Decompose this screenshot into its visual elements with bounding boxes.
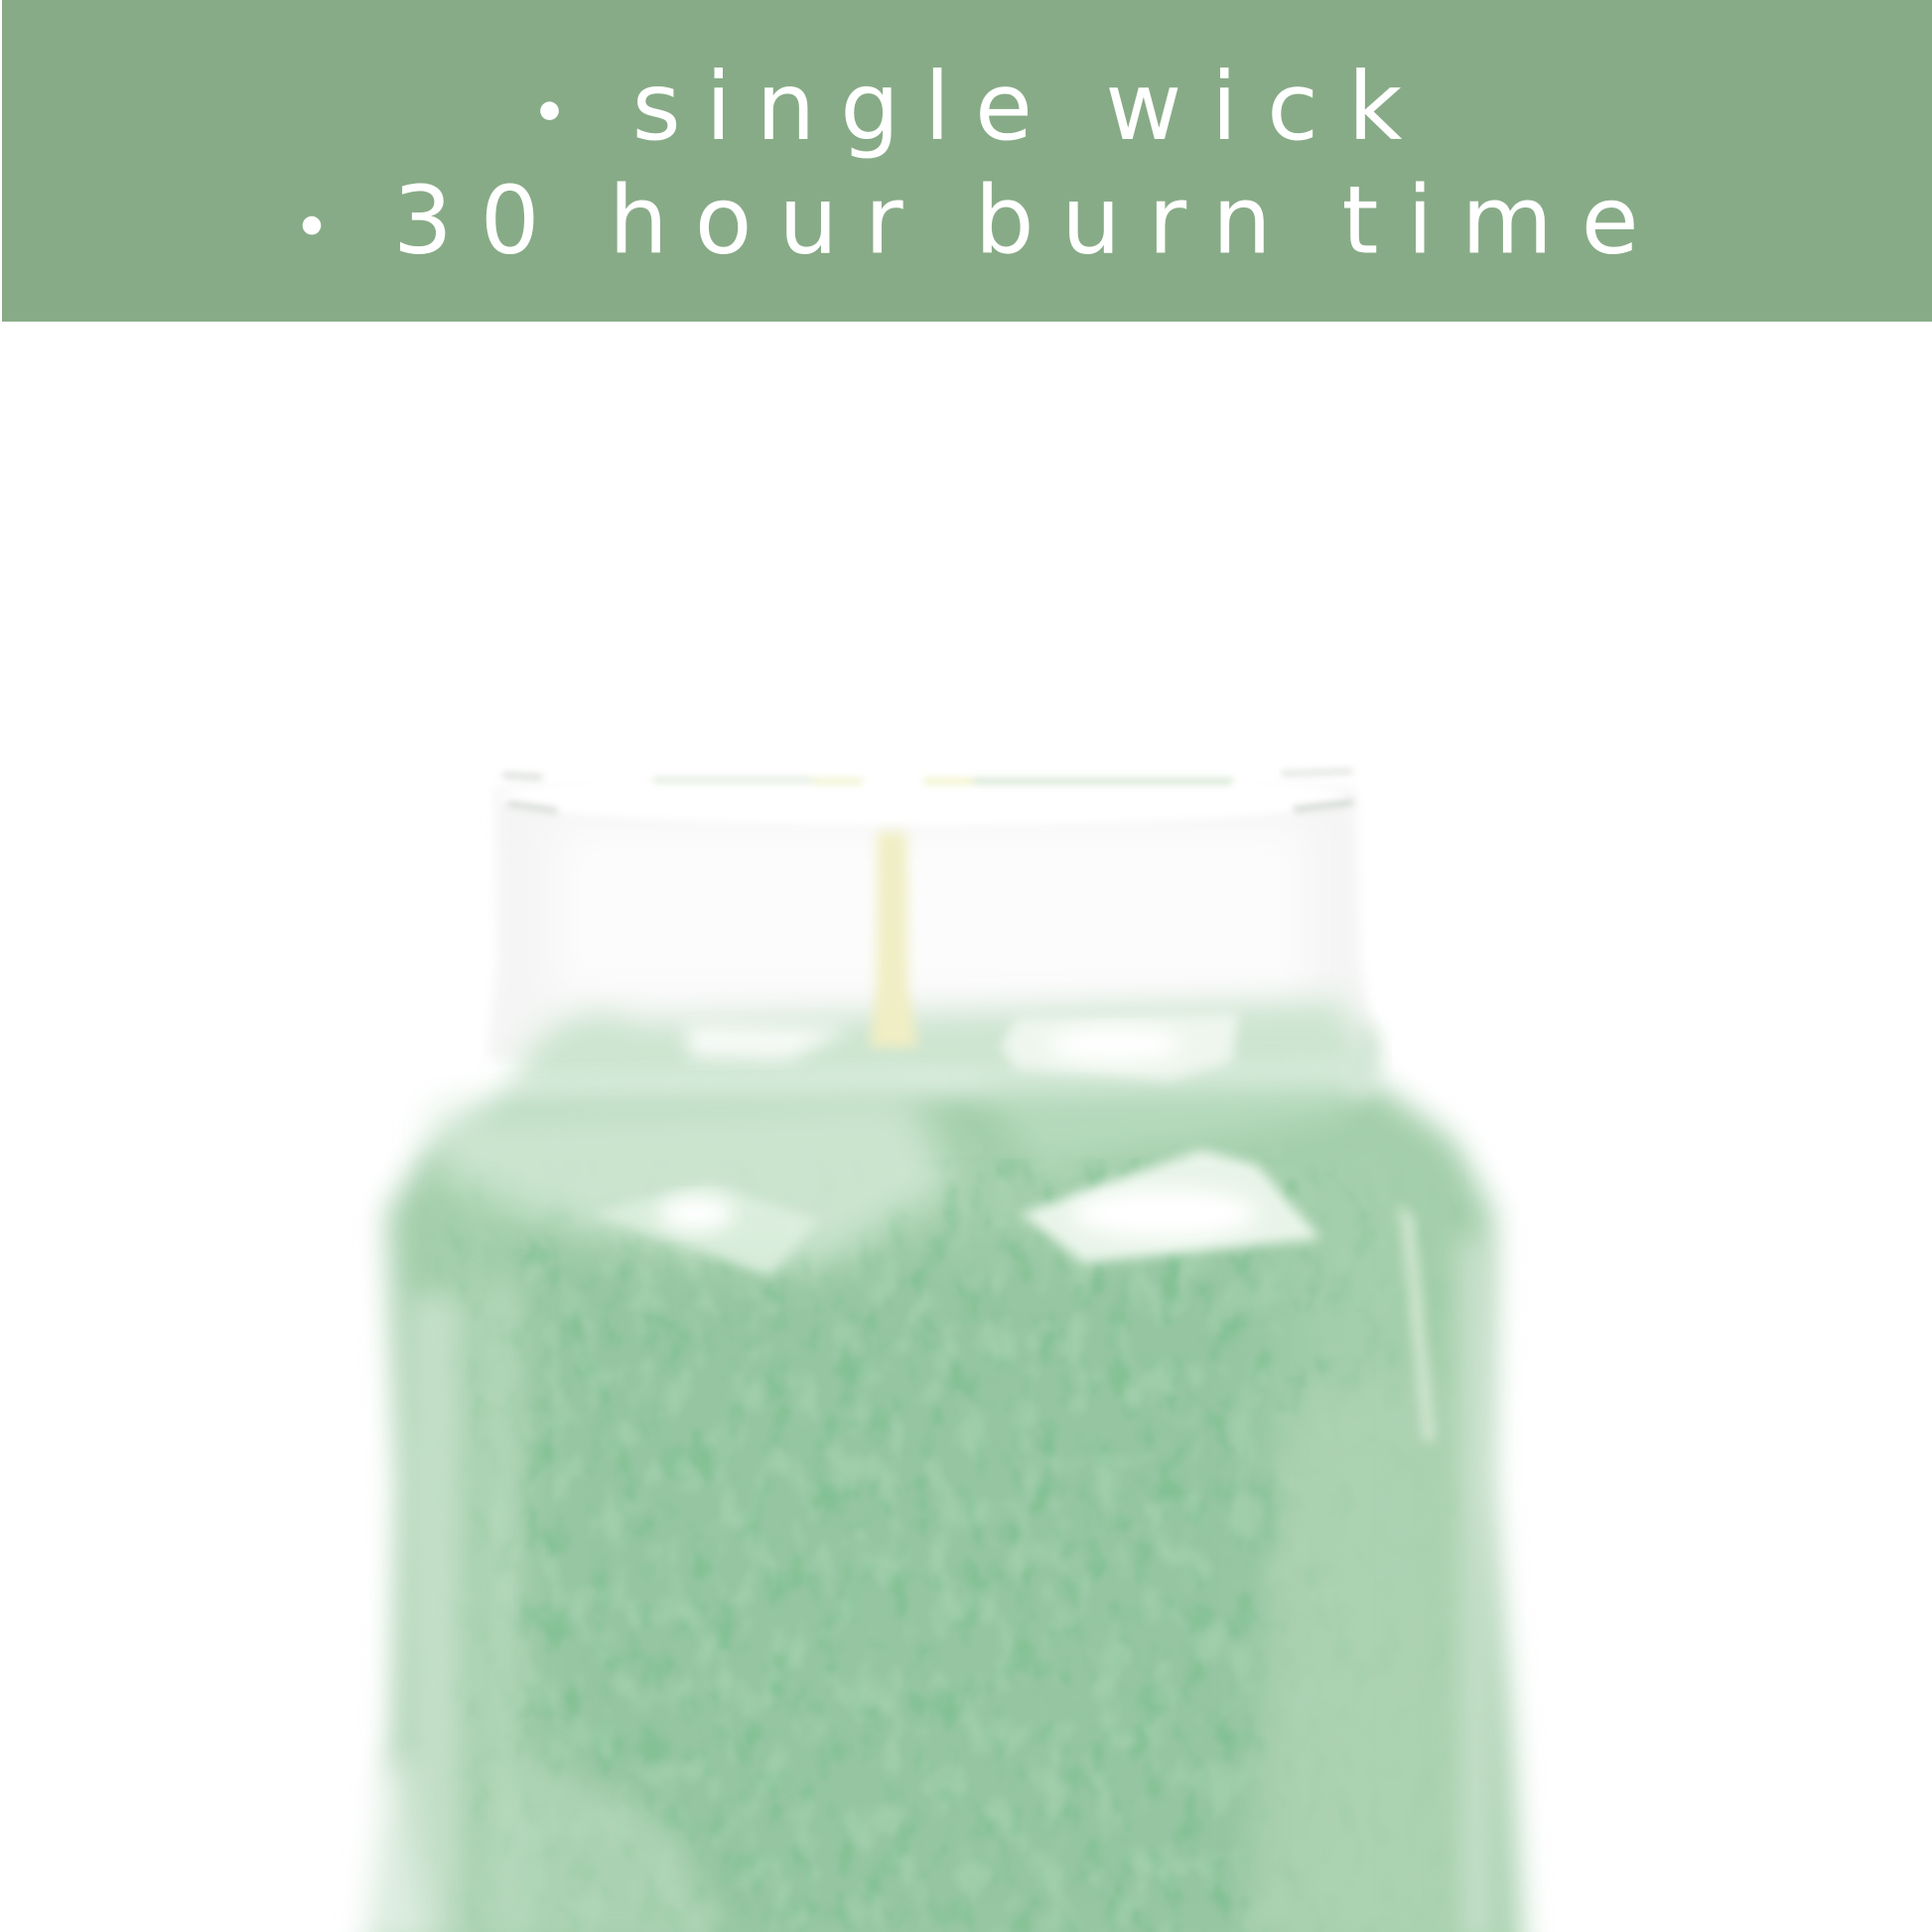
highlight: upper left (685, 1026, 850, 1059)
glass neck (486, 771, 1378, 1059)
feature line: 30 hour burn time: 30 (393, 166, 540, 275)
feature line: single wick (540, 53, 1403, 162)
wax top surface (505, 1001, 1370, 1090)
highlight: upper right (1001, 1013, 1238, 1080)
glass shoulder edge (1340, 1023, 1380, 1103)
pale side streaks (407, 1232, 1491, 1932)
wick (870, 832, 918, 1047)
feature line: 30 hour burn time: burn (975, 166, 1272, 275)
pale shoulder (431, 1090, 955, 1269)
glass rim (502, 771, 1353, 811)
feature line: single wick: wick (1105, 53, 1403, 162)
feature line: 30 hour burn time: time (1342, 166, 1639, 275)
wax body (333, 1023, 1523, 1932)
feature line: 30 hour burn time (303, 166, 1639, 275)
feature line: single wick: single (632, 53, 1033, 162)
feature line: 30 hour burn time: hour (609, 166, 903, 275)
highlight: lower left (592, 1182, 819, 1276)
header band (2, 0, 1932, 322)
wax texture (454, 1159, 1374, 1932)
candle jar (333, 771, 1523, 1932)
highlight: lower right (1021, 1150, 1320, 1263)
